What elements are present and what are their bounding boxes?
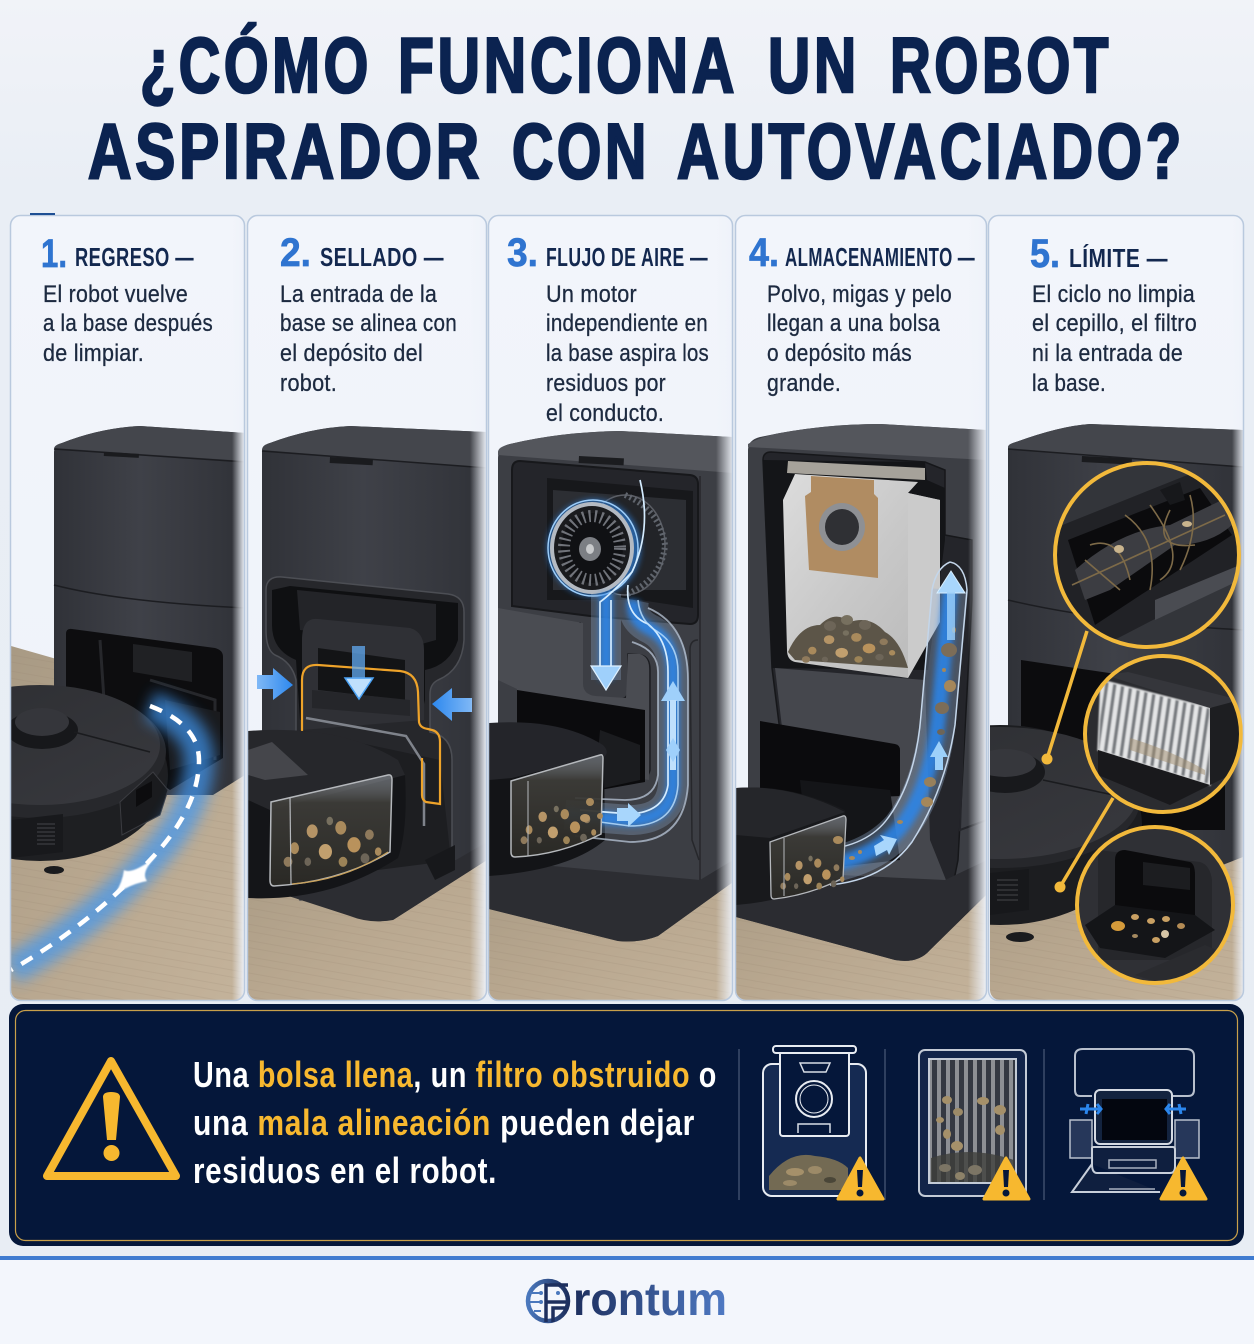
magnifier: dirty brush [1050, 463, 1240, 650]
step 3 text: residuos por [546, 370, 666, 397]
icon: full bag [763, 1046, 883, 1199]
panel: step 5 limite [988, 214, 1244, 1002]
step 2 text: robot. [280, 370, 337, 397]
step 1 text: a la base después [43, 310, 213, 337]
footer [0, 1256, 1254, 1344]
step 2 heading [280, 231, 444, 275]
warning text: residuos en el robot. [193, 1150, 497, 1191]
step 3 text: Un motor [546, 281, 637, 308]
dust bin [270, 775, 392, 886]
arrow: return path [11, 706, 199, 970]
callout lines [1042, 631, 1113, 892]
title: ¿CÓMO [140, 21, 372, 109]
step 4 text [767, 281, 952, 397]
step 1 heading [41, 232, 194, 276]
step 1 text: El robot vuelve [43, 281, 188, 308]
icon: clogged filter [919, 1050, 1029, 1199]
icon: misaligned base [1070, 1049, 1206, 1199]
magnifier: dirty inlet [1077, 827, 1240, 990]
step 2 heading: SELLADO — [320, 242, 444, 272]
step 5 heading: LÍMITE — [1069, 243, 1168, 273]
warning text: Una bolsa llena, un filtro obstruido o [193, 1054, 717, 1095]
step 1 heading: REGRESO — [75, 242, 194, 272]
step 2 text: base se alinea con [280, 310, 457, 337]
illustration: motor airflow through base [489, 431, 732, 1000]
step 2 text: La entrada de la [280, 281, 437, 308]
step 1 heading: 1. [41, 232, 67, 276]
step 3 heading: FLUJO DE AIRE — [546, 242, 708, 272]
title: FUNCIONA [398, 21, 738, 109]
title: ROBOT [890, 21, 1112, 109]
step 5 text: el cepillo, el filtro [1032, 310, 1197, 337]
step 4 heading: ALMACENAMIENTO — [785, 242, 975, 272]
step 5 heading [1030, 232, 1168, 276]
step 3 text: la base aspira los [546, 340, 709, 367]
warning text [193, 1054, 717, 1191]
dust bin [511, 755, 603, 857]
step 3 text: el conducto. [546, 400, 664, 427]
robot and dust bin [736, 787, 862, 905]
step 3 text: independiente en [546, 310, 708, 337]
air ducts [565, 480, 688, 842]
step 3 text [546, 281, 709, 427]
step 4 heading [749, 231, 975, 275]
filter bag [783, 461, 940, 678]
arrows: sealing force [257, 646, 472, 721]
title: ASPIRADOR [88, 107, 483, 195]
step 2 text: el depósito del [280, 340, 423, 367]
step 2 heading: 2. [280, 231, 311, 275]
step 4 text: Polvo, migas y pelo [767, 281, 952, 308]
step 3 heading: 3. [507, 231, 538, 275]
motor fan [547, 495, 665, 597]
illustration: bag storage in base [736, 424, 986, 1000]
illustration: robot returning to base [11, 426, 244, 1000]
warning text: una mala alineación pueden dejar [193, 1102, 695, 1143]
step 4 heading: 4. [749, 231, 779, 275]
arrows: airflow [591, 666, 685, 827]
step 3 heading [507, 231, 708, 275]
step 5 text: El ciclo no limpia [1032, 281, 1195, 308]
step 5 text: la base. [1032, 370, 1106, 397]
panel: step 4 almacenamiento [736, 216, 987, 1000]
panel: warning banner [9, 1004, 1244, 1246]
illustration: what the cycle does not clean [990, 424, 1243, 1000]
logo: Frontum: rontum [573, 1273, 727, 1325]
step 4 text: llegan a una bolsa [767, 310, 940, 337]
title: UN [768, 21, 860, 109]
icon: warning triangle [47, 1061, 176, 1176]
title: CON [512, 107, 650, 195]
panel: step 2 sellado [248, 216, 487, 1000]
step 5 heading: 5. [1030, 232, 1060, 276]
step 5 text [1032, 281, 1197, 397]
step 1 text: de limpiar. [43, 340, 144, 367]
panel: step 1 regreso [0, 213, 245, 1000]
magnifier: clogged filter [1085, 656, 1241, 812]
arrows: debris flow [874, 571, 965, 856]
title [88, 21, 1185, 195]
step 4 text: o depósito más [767, 340, 912, 367]
orange seal outline [302, 665, 440, 804]
step 2 text [280, 281, 457, 397]
panel: step 3 flujo de aire [488, 216, 733, 1000]
step 5 text: ni la entrada de [1032, 340, 1183, 367]
illustration: base sealing with robot [248, 426, 486, 1000]
lower duct and upward air channel [830, 561, 968, 886]
step 1 text [43, 281, 213, 367]
step 4 text: grande. [767, 370, 841, 397]
